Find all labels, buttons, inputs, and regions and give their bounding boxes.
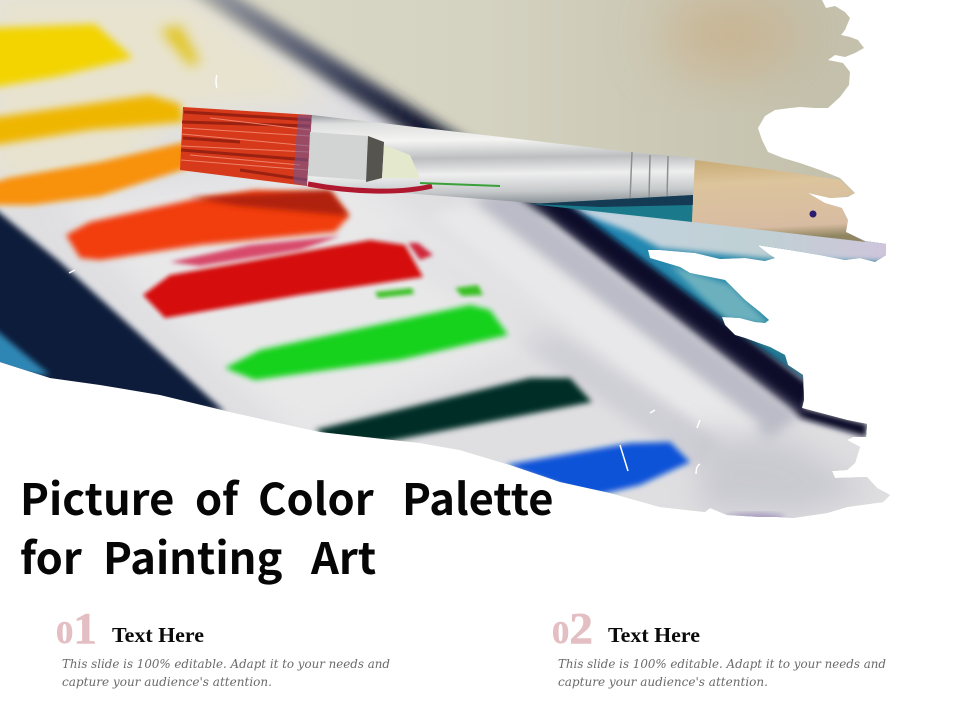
- item 02: [552, 604, 886, 689]
- tray inner shadow band: [524, 328, 712, 462]
- title: [20, 465, 553, 587]
- tray white near pans: [134, 191, 544, 414]
- white specks: [69, 75, 700, 474]
- paint: green: [225, 305, 508, 380]
- paint: red: [143, 240, 423, 318]
- wooden handle: [692, 160, 866, 242]
- paint: green spots: [375, 288, 414, 298]
- item heading: Text Here: [112, 623, 204, 647]
- title: Painting: [103, 524, 282, 587]
- paint: dark teal: [315, 378, 592, 443]
- item description: This slide is 100% editable. Adapt it to your needs and: [62, 657, 390, 671]
- item description: capture your audience's attention.: [558, 675, 768, 689]
- warm tan glow: [660, 0, 800, 70]
- tray rim dark edge upper: [180, 0, 560, 215]
- pink paint smear: [170, 236, 340, 266]
- item description: This slide is 100% editable. Adapt it to your needs and: [558, 657, 886, 671]
- title: Art: [310, 524, 376, 587]
- photo background: [32, 0, 890, 518]
- item description: [558, 657, 886, 689]
- paintbrush: [180, 107, 866, 242]
- tray lower right shadow: [700, 430, 870, 515]
- light blue corner: [0, 325, 50, 375]
- lavender tint: [726, 511, 786, 518]
- title: of: [195, 465, 240, 528]
- tray rim light band: [452, 208, 760, 430]
- item description: capture your audience's attention.: [62, 675, 272, 689]
- number 02: 02: [552, 604, 593, 653]
- title: for: [20, 524, 82, 587]
- teal torn patches: [670, 265, 770, 325]
- title: Color: [258, 465, 374, 528]
- bristles: [180, 107, 312, 186]
- paint: orange: [0, 142, 188, 205]
- paint: golden yellow: [0, 95, 184, 146]
- title: Picture: [20, 465, 174, 528]
- shadow on red orange: [190, 190, 349, 216]
- paint: yellow: [0, 24, 133, 88]
- metal ferrule: [307, 115, 695, 222]
- photo: watercolor palette with torn edge: [0, 0, 890, 518]
- red splatter: [408, 243, 433, 260]
- lower-left dark tray side: [0, 205, 225, 412]
- paint: green spot 2: [455, 285, 483, 296]
- number 01: 01: [56, 604, 97, 653]
- pale blue reflection below brush: [570, 208, 886, 262]
- title: Palette: [402, 465, 553, 528]
- tray rim grey band: [470, 190, 800, 440]
- upper-left warm haze: [0, 0, 330, 190]
- blue table area under tray: [568, 208, 886, 438]
- item heading: Text Here: [608, 623, 700, 647]
- tray body: [0, 0, 900, 530]
- paint: small yellow: [160, 25, 200, 66]
- paint: blue: [505, 442, 690, 497]
- item description: [62, 657, 390, 689]
- item 01: [56, 604, 390, 689]
- tray rim dark edge lower: [510, 190, 867, 437]
- paint: red orange: [66, 190, 349, 260]
- paint fleck on handle: [810, 210, 816, 218]
